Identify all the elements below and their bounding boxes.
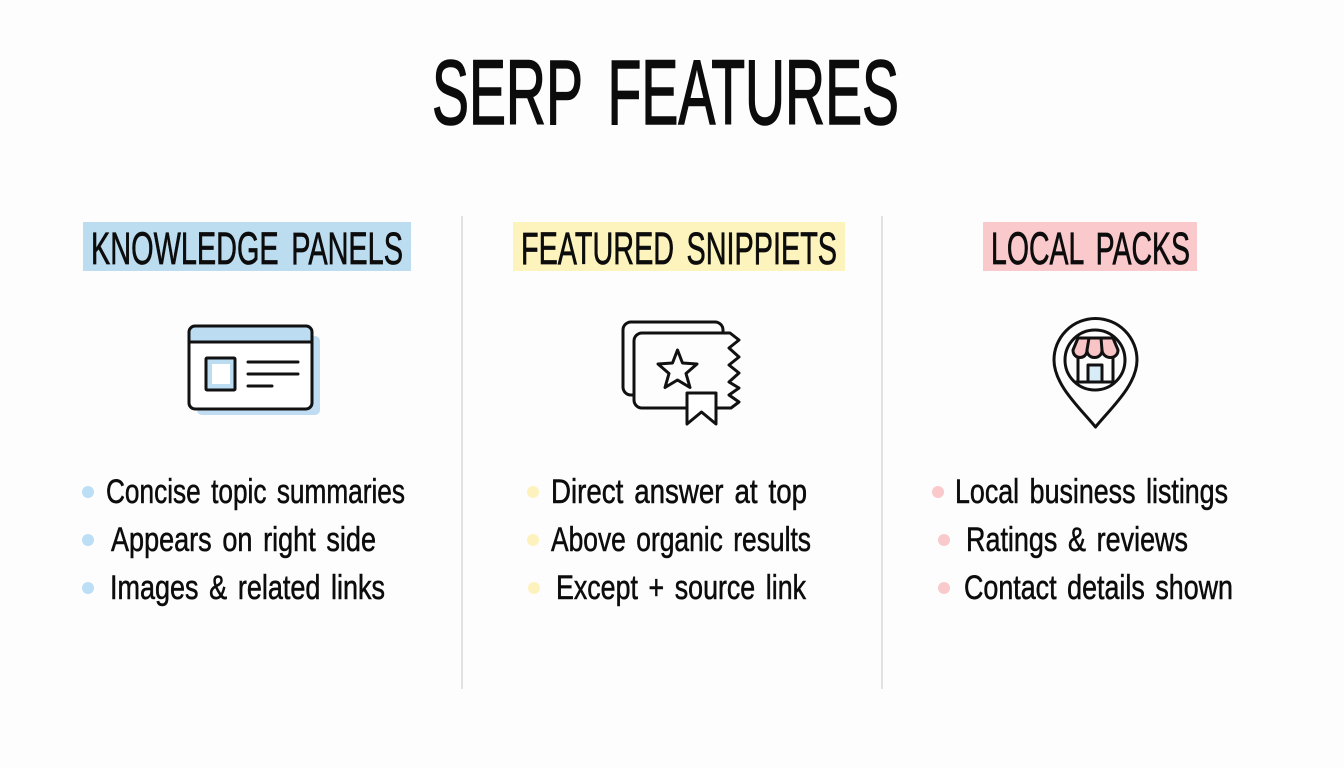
heading: knowledge panels: KNOWLEDGE PANELS (91, 223, 403, 274)
bullet list: featured snippets: Above organic results (551, 521, 811, 559)
bullet list: knowledge panels: Concise topic summaries (106, 473, 405, 511)
bullet list: local packs: Local business listings (955, 473, 1228, 511)
heading: knowledge panels (83, 222, 411, 274)
bullet list: local packs: Contact details shown (964, 569, 1233, 607)
bullet list: featured snippets: Direct answer at top (551, 473, 807, 511)
bullet list: local packs (932, 473, 1233, 607)
icon: snippet cards with star and bookmark (623, 322, 739, 424)
bullet list: knowledge panels (82, 473, 405, 607)
heading: featured snippets (513, 222, 845, 274)
bullet list: featured snippets (527, 473, 811, 607)
panel: local packs (932, 222, 1233, 607)
panel: knowledge panels (82, 222, 411, 607)
title: SERP FEATURES (432, 42, 899, 144)
heading: local packs (983, 222, 1197, 274)
icon: browser card (189, 326, 320, 415)
bullet list: local packs: Ratings & reviews (966, 521, 1188, 559)
bullet list: knowledge panels: Images & related links (110, 569, 385, 607)
heading: local packs: LOCAL PACKS (991, 223, 1190, 274)
icon: map pin with storefront (1054, 318, 1137, 427)
heading: featured snippets: FEATURED SNIPPIETS (521, 223, 837, 274)
bullet list: knowledge panels: Appears on right side (111, 521, 376, 559)
bullet list: featured snippets: Except + source link (556, 569, 807, 607)
panel: featured snippets (513, 222, 845, 607)
